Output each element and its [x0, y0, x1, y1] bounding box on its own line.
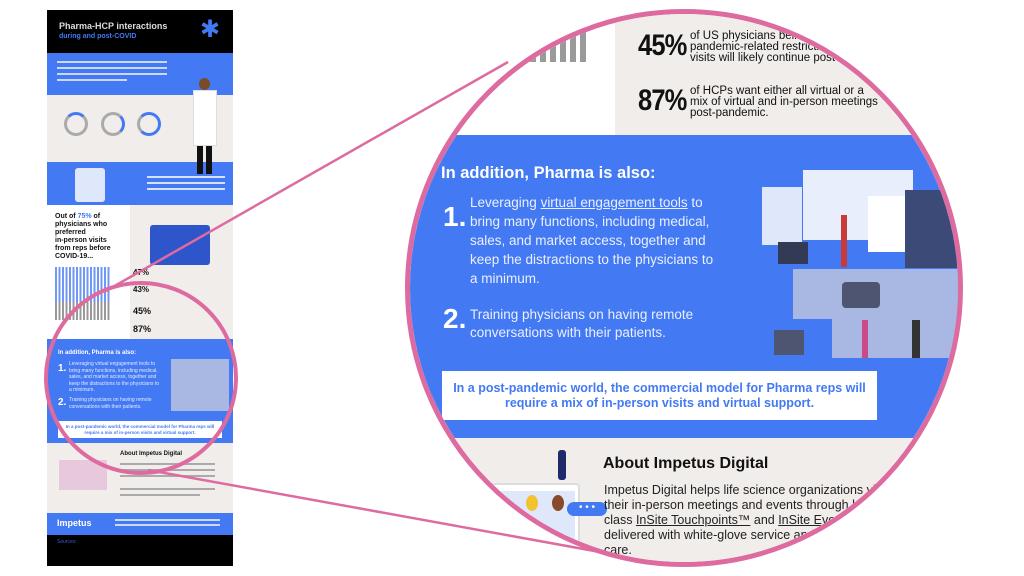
intro band: [47, 53, 233, 95]
about section: their in-person meetings and events through best-in-: [604, 498, 894, 512]
header: Pharma-HCP interactions: [59, 21, 167, 31]
footer logo band: Impetus: [57, 518, 92, 528]
stats panel: of HCPs want either all virtual or a: [690, 85, 864, 97]
about section: [0, 438, 1024, 576]
header: [47, 10, 233, 53]
conclusion box: In a post-pandemic world, the commercial model for Pharma reps will: [453, 381, 866, 395]
out of 75% block: Out of 75% of: [55, 213, 100, 220]
stats panel: mix of virtual and in-person meetings: [690, 96, 878, 108]
small circle: [44, 281, 238, 475]
thumbnail infographic: [47, 10, 233, 566]
blue section: conversations with their patients.: [470, 325, 666, 340]
blue section: 1.: [58, 363, 66, 374]
about section: About Impetus Digital: [603, 455, 768, 472]
blue section: Training physicians on having remote conversations with their patients.: [69, 397, 152, 410]
stats small: 47%: [133, 268, 149, 277]
blue section: 2.: [443, 303, 466, 334]
blue section: [47, 339, 233, 443]
footer logo band: [47, 513, 233, 535]
stats small: 43%: [133, 285, 149, 294]
stats panel: post-pandemic.: [690, 107, 769, 119]
out of 75% block: in-person visits: [55, 237, 107, 244]
sources: [47, 535, 233, 566]
conclusion box: [442, 371, 877, 420]
blue section: Leveraging virtual engagement tools to: [470, 195, 703, 210]
blue section: a minimum.: [470, 271, 540, 286]
illustration: video call: [492, 483, 580, 542]
laptop illustration: [150, 225, 210, 265]
blue section: In a post-pandemic world, the commercial model for Pharma reps will: [66, 424, 214, 429]
stats panel: visits will likely continue post-COVID.: [690, 52, 879, 64]
stats panel: 87%: [638, 84, 686, 117]
header: during and post-COVID: [59, 33, 136, 40]
about section: Impetus Digital helps life science organizations virtualize: [604, 483, 916, 497]
blue section: 2.: [58, 397, 66, 408]
blue section: In addition, Pharma is also:: [441, 164, 656, 182]
about: About Impetus Digital: [120, 451, 182, 457]
blue section: keep the distractions to the physicians to: [470, 252, 713, 267]
stats panel: of US physicians believe that: [690, 30, 838, 42]
about section: class InSite Touchpoints™ and InSite Events, all: [604, 513, 871, 527]
blue section: [0, 135, 1024, 438]
stats panel: pandemic-related restrictions on: [690, 41, 854, 53]
stats small: 45%: [133, 306, 151, 316]
blue section: sales, and market access, together and: [470, 233, 706, 248]
stats panel: 45%: [638, 29, 686, 62]
about section: care.: [604, 543, 632, 557]
about section: delivered with white-glove service and: [604, 528, 815, 542]
blue section: require a mix of in-person visits and virtual support.: [84, 430, 196, 435]
stats small: [133, 268, 151, 334]
stats small: 87%: [133, 324, 151, 334]
blue section: Leveraging virtual engagement tools to bring many functions, including medical, sales, and market access, together and keep the distractions to the physicians to a minimum.: [69, 361, 159, 393]
stats panel: [615, 0, 1024, 135]
survey circles: [64, 112, 161, 136]
header: ✱: [200, 16, 220, 43]
blue band 2: [47, 162, 233, 205]
blue section: Training physicians on having remote: [470, 307, 693, 322]
blue section: 1.: [443, 201, 466, 232]
out of 75% block: COVID-19...: [55, 253, 93, 260]
out of 75% block: preferred: [55, 229, 86, 236]
blue section: In addition, Pharma is also:: [58, 350, 136, 356]
conclusion box: require a mix of in-person visits and virtual support.: [505, 396, 814, 410]
big magnified circle: [405, 9, 963, 567]
about: [59, 450, 215, 496]
sources: Sources:: [57, 539, 77, 545]
people icons: [510, 28, 588, 62]
blue section: bring many functions, including medical,: [470, 214, 709, 229]
about section: • • •: [579, 502, 595, 513]
out of 75% block: physicians who: [55, 221, 107, 228]
out of 75% block: [47, 205, 130, 339]
doctor: [193, 78, 217, 174]
illustration: virtual event: [762, 170, 958, 358]
out of 75% block: from reps before: [55, 245, 111, 252]
